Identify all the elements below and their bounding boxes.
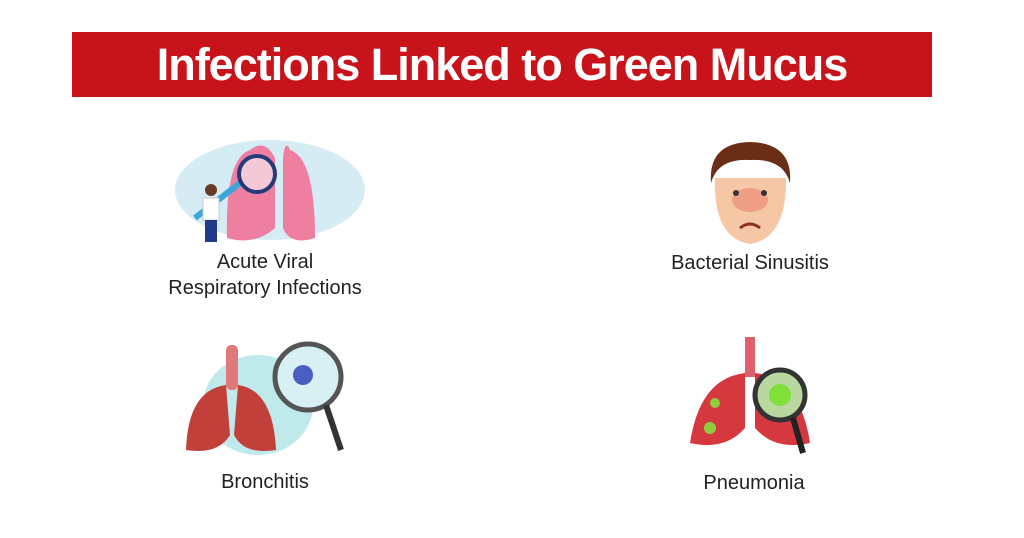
label: sinusitis: Bacterial Sinusitis — [671, 252, 829, 274]
label: bronchitis: Bronchitis — [221, 471, 309, 493]
title — [72, 32, 932, 97]
icon: bronchitis — [186, 342, 344, 455]
label: acute viral: Respiratory Infections — [168, 277, 362, 299]
icon: pneumonia — [690, 337, 810, 454]
label: pneumonia: Pneumonia — [703, 472, 805, 494]
title: Infections Linked to Green Mucus — [157, 39, 847, 90]
label: acute viral: Acute Viral — [217, 251, 313, 273]
icon: lungs with doctor — [175, 140, 365, 242]
label: acute viral — [168, 251, 362, 299]
icon: face — [710, 142, 790, 244]
